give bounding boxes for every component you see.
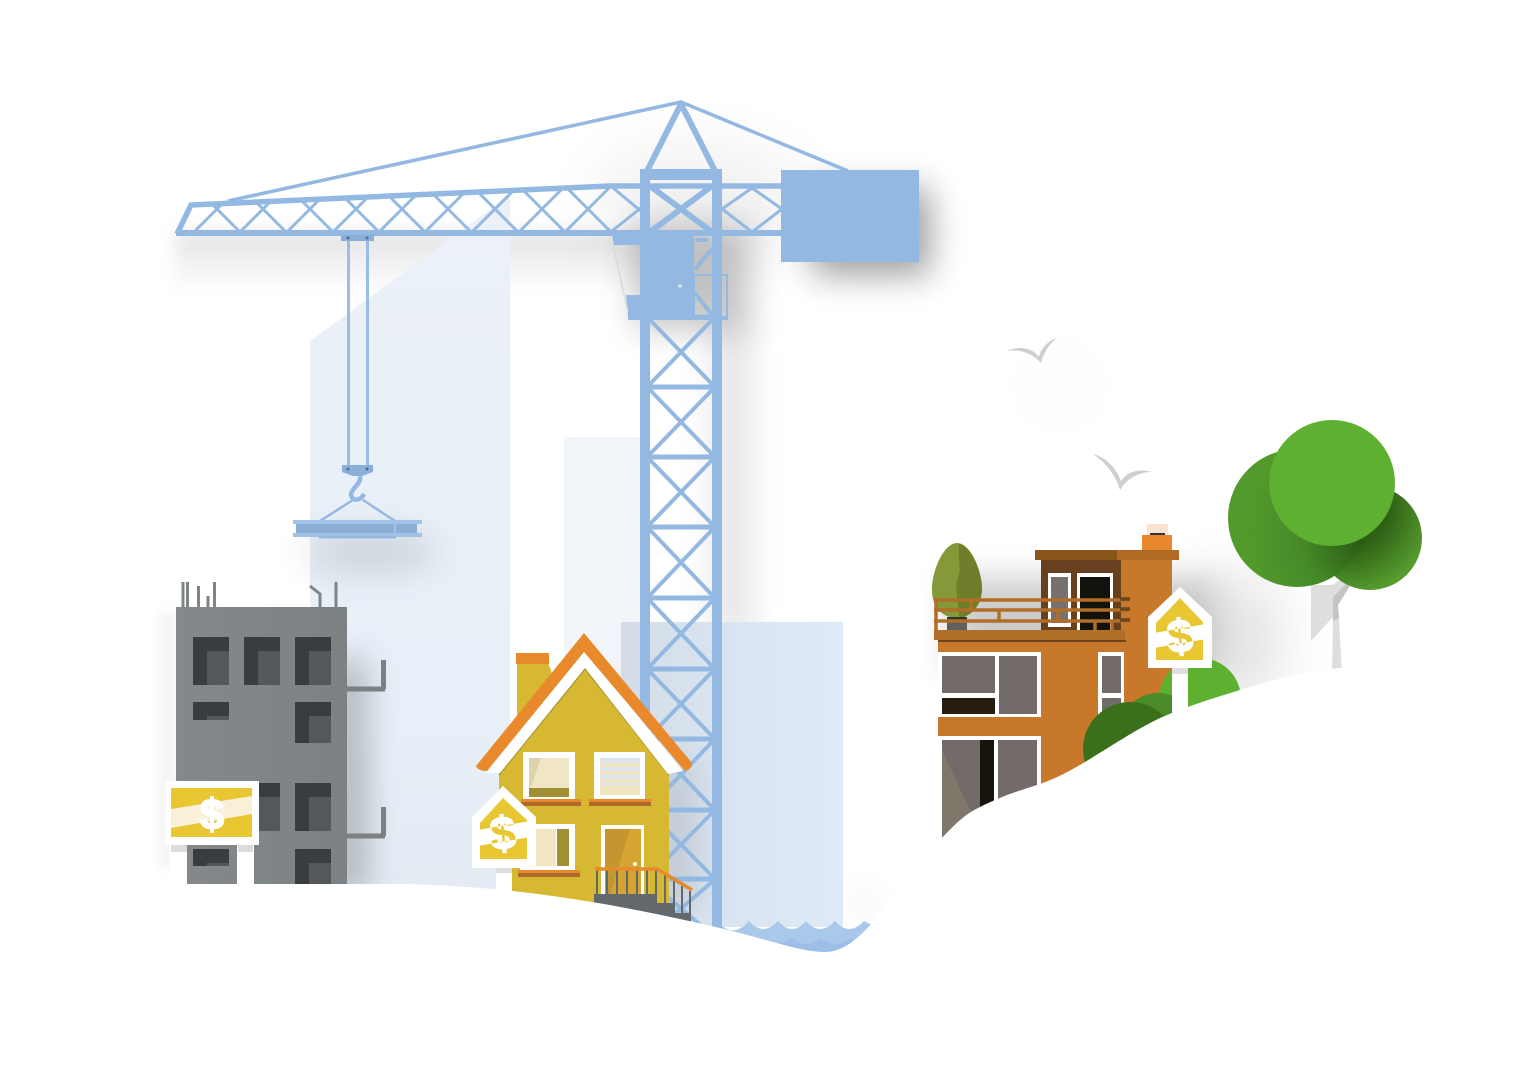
lower balcony — [345, 807, 385, 836]
crane tower — [645, 170, 717, 935]
upper storey — [1041, 560, 1121, 630]
potted tree — [932, 543, 982, 630]
porch railing — [595, 869, 692, 913]
porch base — [594, 894, 691, 925]
tree — [1228, 420, 1422, 672]
bird upper — [1007, 338, 1057, 363]
for-sale billboard — [165, 781, 259, 885]
water — [720, 921, 872, 960]
house body — [499, 668, 669, 910]
cables — [348, 241, 368, 466]
white fascia — [486, 650, 683, 774]
right foliage — [1318, 486, 1422, 590]
upper left window — [523, 752, 575, 800]
crane jib — [176, 186, 785, 234]
rebar — [183, 582, 336, 607]
bird lower — [1093, 454, 1152, 490]
foreground hill — [155, 668, 1517, 1089]
windows — [193, 637, 331, 885]
upper right window — [594, 752, 645, 800]
hook block — [342, 465, 373, 500]
price sign: $ — [1165, 609, 1195, 663]
upper doors — [1048, 573, 1113, 631]
trunk — [1311, 580, 1350, 672]
crane hook and load — [293, 235, 422, 538]
window sills — [521, 799, 651, 806]
crane counterweight — [781, 170, 919, 262]
price sign: $ — [488, 806, 518, 860]
crane mast top and tie cables — [228, 102, 848, 201]
patio doors — [938, 736, 1041, 850]
orange roof — [476, 633, 692, 771]
steel beam — [293, 520, 422, 538]
front foliage — [1269, 420, 1395, 546]
chimney — [1142, 524, 1172, 550]
background building: wide blue block — [621, 622, 843, 927]
crane cab — [612, 235, 728, 320]
roof terrace railing and floor — [934, 599, 1130, 642]
front door — [601, 825, 644, 895]
price sign: $ — [488, 806, 518, 860]
flat roof — [1035, 550, 1179, 560]
building body — [176, 607, 347, 885]
slings — [320, 500, 395, 521]
narrow window — [1098, 652, 1124, 722]
brown house — [932, 524, 1241, 850]
yellow house — [472, 633, 692, 925]
chimney — [516, 653, 553, 730]
price sign — [472, 786, 536, 894]
lower window — [518, 824, 580, 877]
price sign: $ — [1165, 609, 1195, 663]
upper balcony — [345, 660, 385, 689]
for-sale billboard: $ — [200, 791, 224, 839]
shadow: beam load and grey building — [160, 530, 695, 910]
background building: narrow pale tower — [564, 437, 641, 737]
price sign — [1148, 587, 1212, 713]
left foliage — [1228, 449, 1366, 587]
trolley — [341, 235, 374, 241]
crane — [176, 102, 919, 935]
eave shadow — [499, 661, 669, 776]
background building: tall pale tower — [310, 195, 510, 890]
large window — [938, 652, 1041, 717]
background shadows — [175, 140, 1280, 925]
grey building — [165, 582, 385, 885]
house body — [938, 635, 1138, 850]
bushes — [1083, 658, 1241, 796]
